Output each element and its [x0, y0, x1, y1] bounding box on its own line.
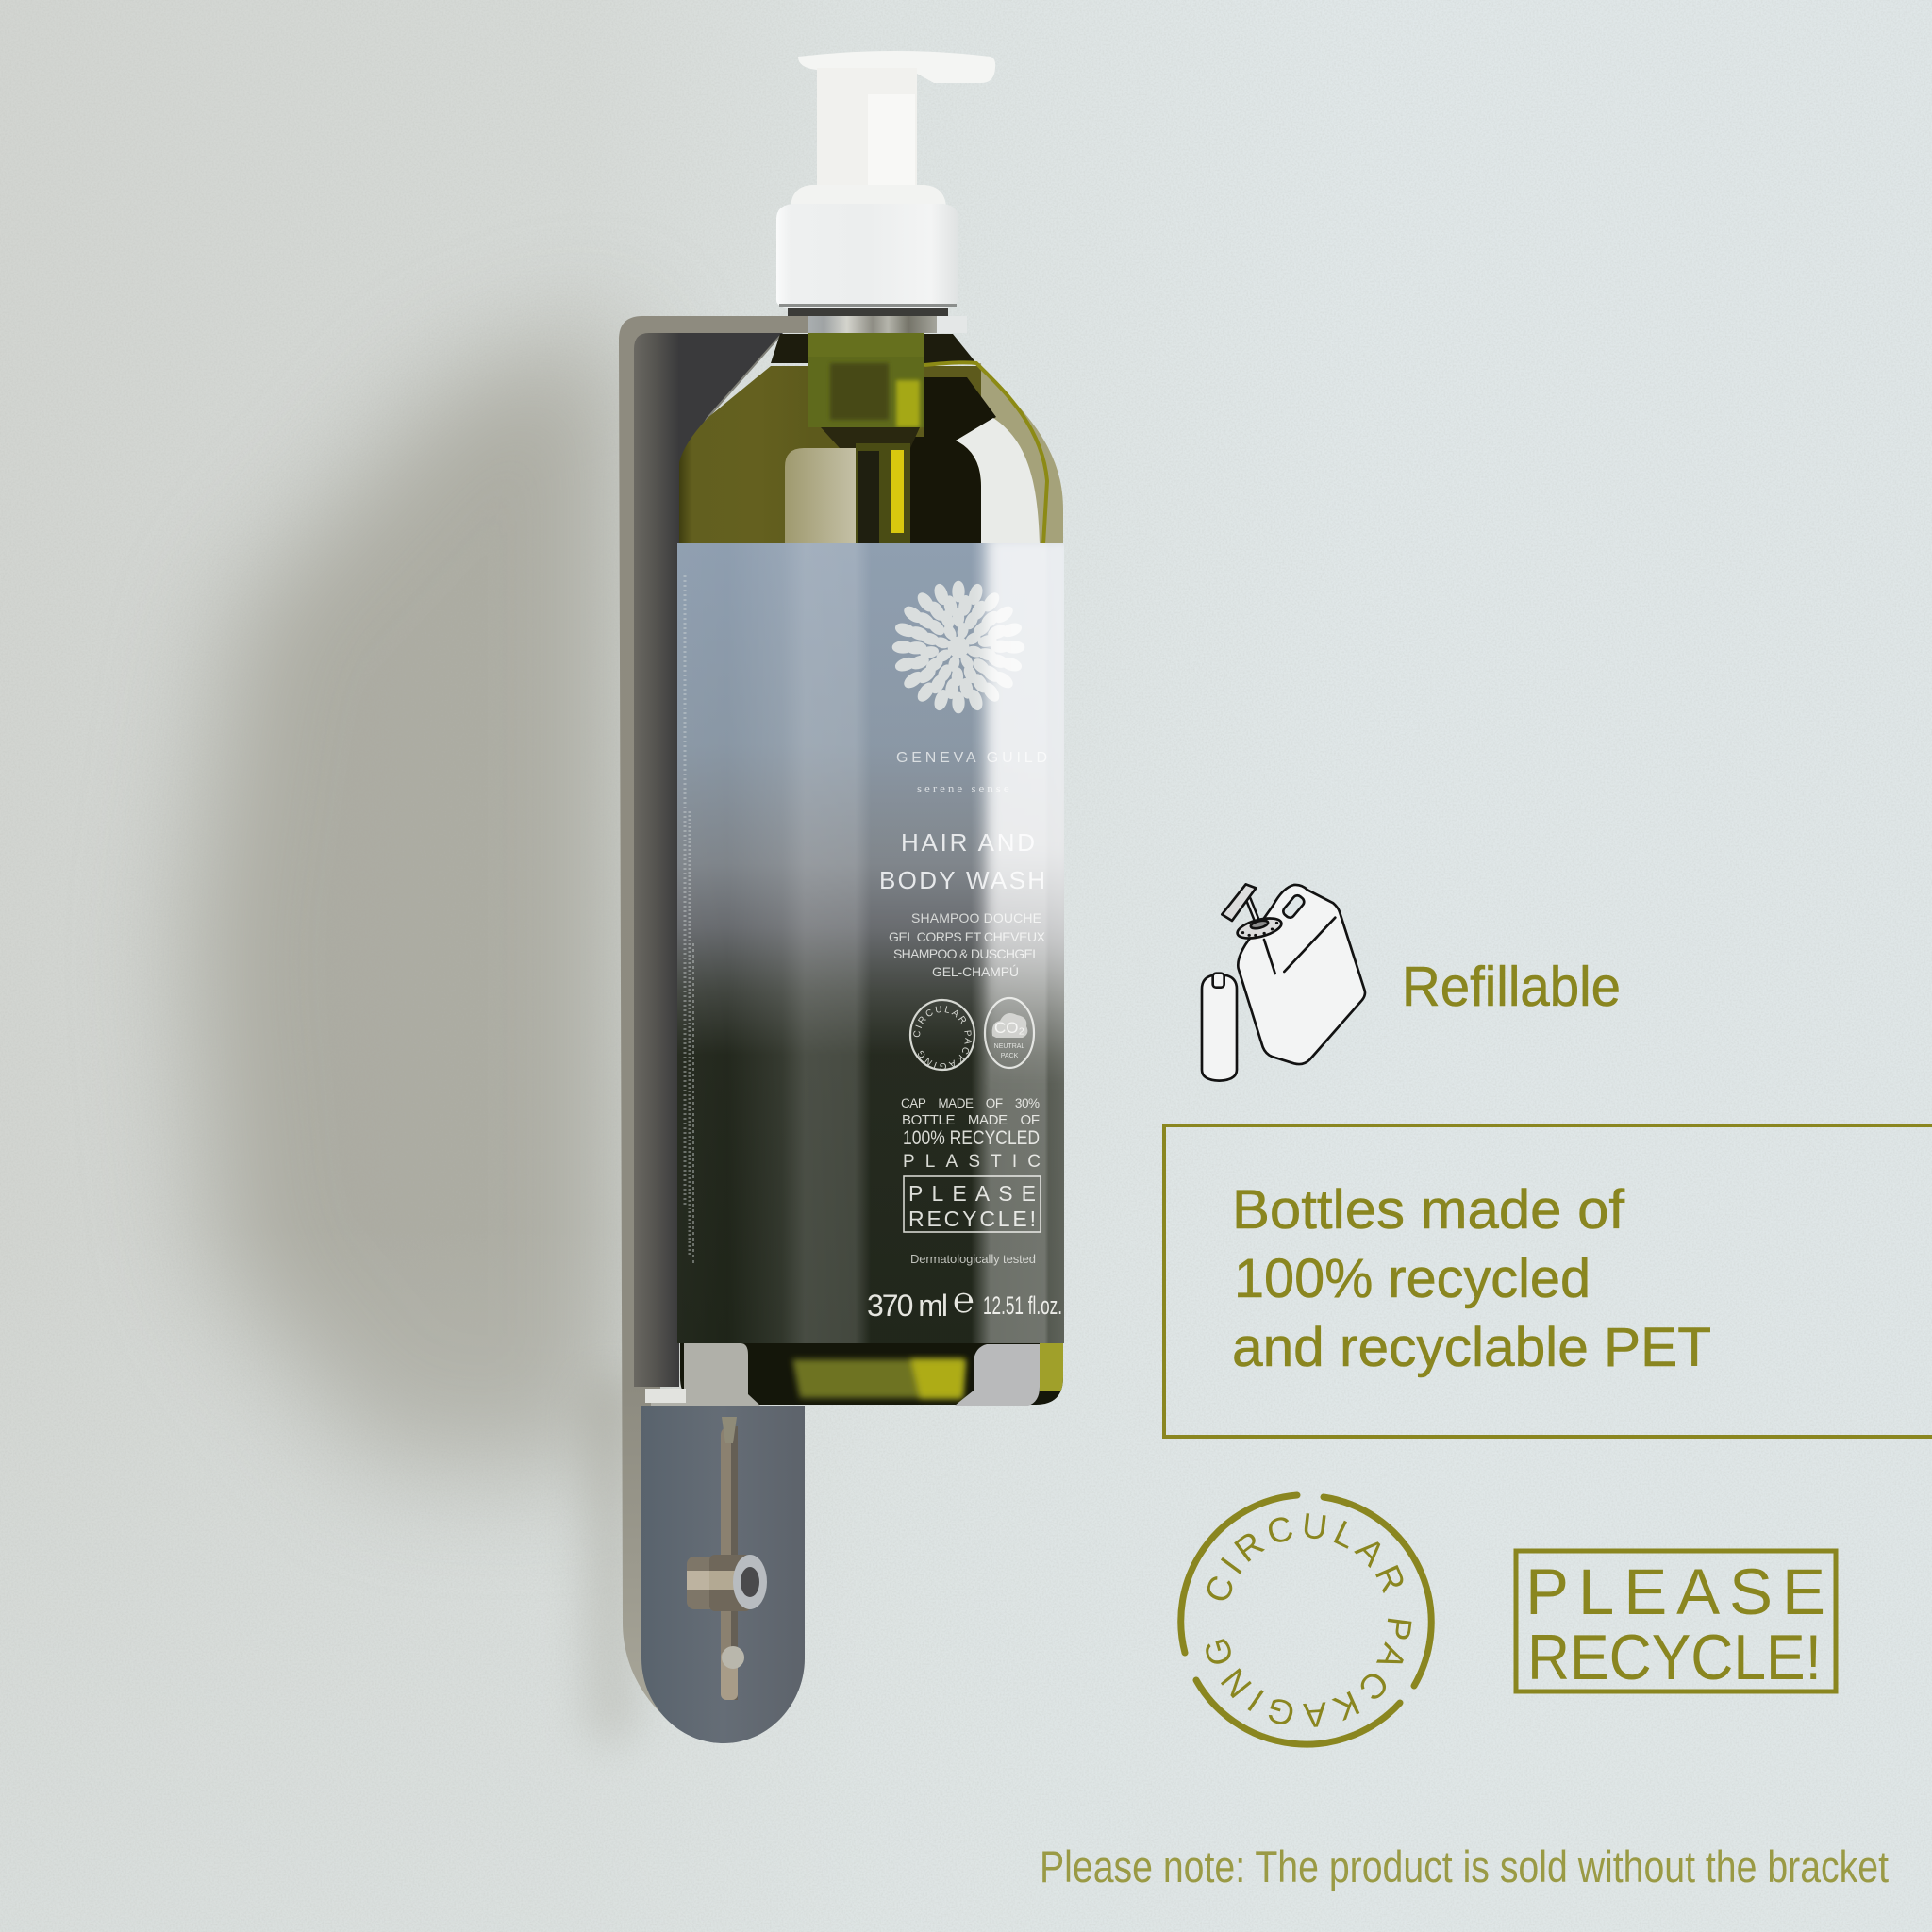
label translations: GEL CORPS ET CHEVEUX	[889, 929, 1046, 944]
label volume: 370 ml	[867, 1289, 948, 1323]
label product name	[879, 828, 1045, 894]
glass edge line	[681, 336, 780, 462]
rim yellow line	[924, 362, 1047, 544]
pump collar	[791, 185, 946, 209]
label volume	[867, 1281, 1062, 1323]
backplate inner face	[634, 333, 783, 1387]
right clip	[955, 1344, 1040, 1406]
badge: circular packaging: CIRCULAR PACKAGING	[1206, 1513, 1411, 1727]
pump cap	[776, 204, 958, 308]
small screw	[721, 1646, 744, 1700]
bracket: lower mounting plate	[641, 1406, 805, 1743]
canister inner lines	[1264, 918, 1335, 974]
dark shoulder top	[771, 334, 976, 363]
olive liquid body	[679, 366, 981, 544]
left clip	[651, 1343, 760, 1406]
plate face	[641, 1406, 805, 1743]
label translations	[889, 910, 1046, 979]
right rim of bottle	[976, 363, 1063, 544]
callout box: bottles material	[1164, 1125, 1932, 1437]
label badge: CO2 neutral: NEUTRAL	[994, 1043, 1024, 1050]
pump on canister	[1222, 884, 1283, 942]
large hex screw	[687, 1555, 767, 1611]
label badge: circular packaging: CIRCULAR PACKAGING	[913, 1006, 972, 1069]
icon: refill canister with pump and small bottle	[1202, 884, 1365, 1081]
small bottle	[1202, 974, 1237, 1081]
label badge: CO2 neutral: PACK	[1001, 1053, 1019, 1059]
label translations: SHAMPOO & DUSCHGEL	[893, 946, 1040, 961]
label base gradient	[677, 543, 1064, 1343]
canister handle hole	[1281, 893, 1306, 920]
bracket cast shadow on wall	[189, 321, 638, 1745]
label brand text: GENEVA GUILD	[896, 750, 1047, 766]
bracket shelf	[645, 1389, 686, 1403]
label fine print column	[685, 575, 693, 1264]
label translations: SHAMPOO DOUCHE	[911, 910, 1041, 925]
label light bands	[677, 543, 1064, 1343]
pale left reflection	[785, 448, 856, 544]
dark right reflection	[910, 377, 996, 544]
label text: Refillable: Refillable	[1402, 956, 1621, 1018]
backplate outer edge	[619, 316, 966, 1743]
label please recycle box: RECYCLE!	[908, 1207, 1036, 1231]
label upper specular highlight	[989, 538, 1074, 1085]
label badge: CO2 neutral: CO₂	[994, 1019, 1024, 1037]
pump tube	[856, 443, 910, 544]
label brand text: serene sense	[917, 781, 1012, 795]
label please recycle box: PLEASE	[908, 1181, 1036, 1206]
label translations: GEL-CHAMPÚ	[932, 964, 1019, 979]
canister body	[1238, 885, 1365, 1064]
callout text	[1232, 1179, 1711, 1378]
label recycled statement: PLASTIC	[903, 1152, 1041, 1172]
pump	[776, 51, 995, 316]
lighter lower wall	[0, 1226, 1932, 1932]
bracket: backplate	[619, 316, 966, 1743]
label recycled statement: CAP MADE OF 30%	[901, 1096, 1040, 1110]
logo: flower	[894, 583, 1023, 711]
label recycled statement	[901, 1096, 1041, 1172]
bottle base liquid	[680, 1343, 1063, 1406]
label volume: ℮	[953, 1281, 974, 1321]
badge: please recycle: PLEASE	[1525, 1556, 1825, 1628]
badge: please recycle: RECYCLE!	[1527, 1622, 1822, 1693]
callout text: 100% recycled	[1234, 1248, 1591, 1309]
badge: please recycle	[1516, 1551, 1836, 1693]
label dermatological note: Dermatologically tested	[910, 1252, 1036, 1266]
label product name: BODY WASH	[879, 866, 1045, 894]
white right reflection	[956, 418, 1040, 544]
pump stem	[817, 68, 917, 189]
label badge: CO2 neutral	[985, 998, 1034, 1068]
bottle base and bracket clips	[645, 1343, 1063, 1406]
callout text: Bottles made of	[1232, 1179, 1625, 1241]
pump nozzle	[798, 51, 995, 83]
label product name: HAIR AND	[901, 828, 1035, 857]
metal collar ring	[808, 316, 967, 333]
bottle upper glass	[679, 333, 1063, 544]
neck thread	[808, 333, 924, 448]
label brand text	[896, 750, 1047, 795]
callout text: and recyclable PET	[1232, 1317, 1711, 1378]
label please recycle box	[904, 1176, 1041, 1232]
label recycled statement: BOTTLE MADE OF	[902, 1112, 1040, 1128]
label volume: 12.51 fl.oz.	[983, 1291, 1062, 1320]
label recycled statement: 100% RECYCLED	[903, 1127, 1040, 1149]
product label	[677, 543, 1064, 1343]
mounting slot	[721, 1417, 738, 1700]
